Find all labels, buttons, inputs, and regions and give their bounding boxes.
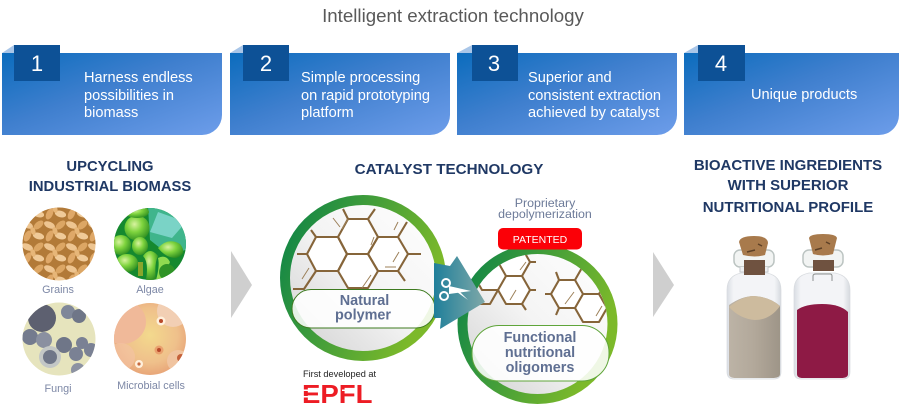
image: magenta powder bottle [794,234,850,379]
logo: EPFL: EPFL [302,379,373,409]
icon: scissors [440,279,471,300]
heading: bioactive ingredients: WITH SUPERIOR [728,177,849,194]
label: functional nutritional oligomers [472,326,609,381]
step card 2: 2 [260,51,272,76]
caption: proprietary depolymerization: depolymerization [498,207,592,221]
oligomer hexagon fragments [478,255,606,323]
heading: upcycling [29,159,191,195]
step card 1: biomass [84,105,138,121]
step card 2: platform [301,105,354,121]
label: functional nutritional oligomers: nutritional [505,345,575,361]
caption: grains: Grains [42,284,74,296]
step card 4: Unique products [751,87,857,103]
label: natural polymer [292,290,435,328]
image: grains [22,208,96,280]
step card 2: on rapid prototyping [301,88,430,104]
first developed at EPFL: First developed at [303,369,376,379]
step card 1: Harness endless [84,70,193,86]
step card 1 [2,45,222,135]
label: functional nutritional oligomers: oligomers [506,360,574,376]
caption: proprietary depolymerization [498,196,592,221]
first developed at EPFL [302,369,376,409]
label: natural polymer: Natural [340,293,389,309]
caption: proprietary depolymerization: Proprietary [515,196,576,210]
heading: upcycling: INDUSTRIAL BIOMASS [29,179,191,195]
step card 3: consistent extraction [528,88,661,104]
heading: bioactive ingredients [694,157,882,216]
label: functional nutritional oligomers: Functional [504,330,576,346]
step card 1: 1 [31,51,43,76]
step card 2 [230,45,450,135]
step card 2: Simple processing [301,70,420,86]
step card 3: achieved by catalyst [528,105,659,121]
heading: upcycling: UPCYCLING [66,159,154,175]
caption: microbial cells: Microbial cells [117,380,185,392]
heading: catalyst technology: CATALYST TECHNOLOGY [355,161,543,178]
arrow: chevron right [653,252,674,317]
step card 3 [457,45,677,135]
arrow: chevron left [231,251,252,318]
step card 3: 3 [488,51,500,76]
arrow: scissors step [434,256,485,329]
image: microbial cells [114,303,186,375]
image: fungi [22,302,96,376]
label: natural polymer: polymer [335,308,391,324]
title: Intelligent extraction technology [322,5,585,26]
circle: natural polymer [285,200,441,356]
step card 1: possibilities in [84,88,174,104]
image: beige powder bottle [727,236,781,379]
polymer hexagon network [293,209,421,289]
badge: patented [498,228,582,250]
step card 4 [684,45,899,135]
badge: patented: PATENTED [513,234,568,246]
step card 4: 4 [715,51,727,76]
circle: functional oligomers [462,248,612,399]
heading: bioactive ingredients: BIOACTIVE INGREDIENTS [694,157,882,174]
step card 3: Superior and [528,70,612,86]
caption: algae: Algae [136,284,164,296]
heading: bioactive ingredients: NUTRITIONAL PROFILE [703,199,873,216]
image: algae [114,208,186,280]
caption: fungi: Fungi [44,383,72,395]
